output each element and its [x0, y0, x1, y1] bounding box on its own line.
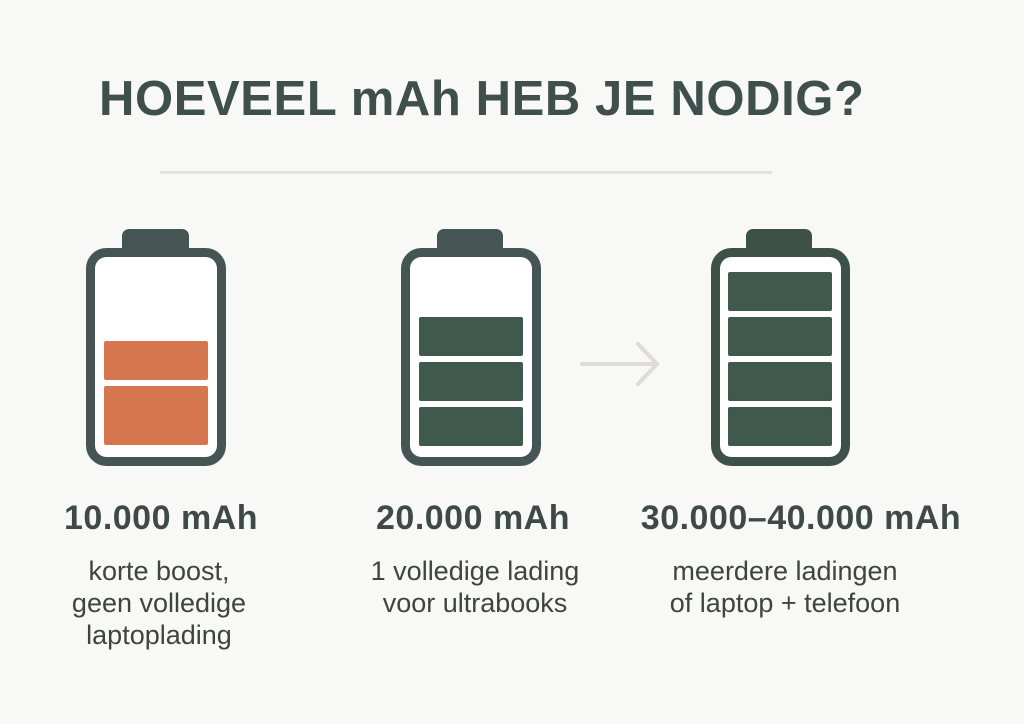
title: HOEVEEL mAh HEB JE NODIG? — [99, 72, 865, 126]
icon: battery 30000-40000 — [716, 229, 846, 462]
description: 10000: geen volledige — [72, 588, 246, 618]
description: 10000: korte boost, — [88, 556, 230, 586]
description: 10000 — [72, 556, 246, 650]
description: 30000-40000 — [670, 556, 900, 618]
description: 30000-40000: of laptop + telefoon — [670, 588, 900, 618]
arrow — [582, 344, 657, 384]
description: 10000: laptoplading — [86, 620, 232, 650]
description: 20000: voor ultrabooks — [383, 588, 567, 618]
description: 20000: 1 volledige lading — [371, 556, 579, 586]
description: 30000-40000: meerdere ladingen — [672, 556, 898, 586]
description: 20000 — [371, 556, 579, 618]
label: 20000: 20.000 mAh — [376, 499, 570, 537]
icon: battery 10000 — [90, 229, 222, 462]
divider line — [160, 171, 772, 174]
label: 10000: 10.000 mAh — [64, 499, 258, 537]
icon: battery 20000 — [406, 229, 536, 462]
label: 30000-40000: 30.000–40.000 mAh — [641, 499, 961, 537]
